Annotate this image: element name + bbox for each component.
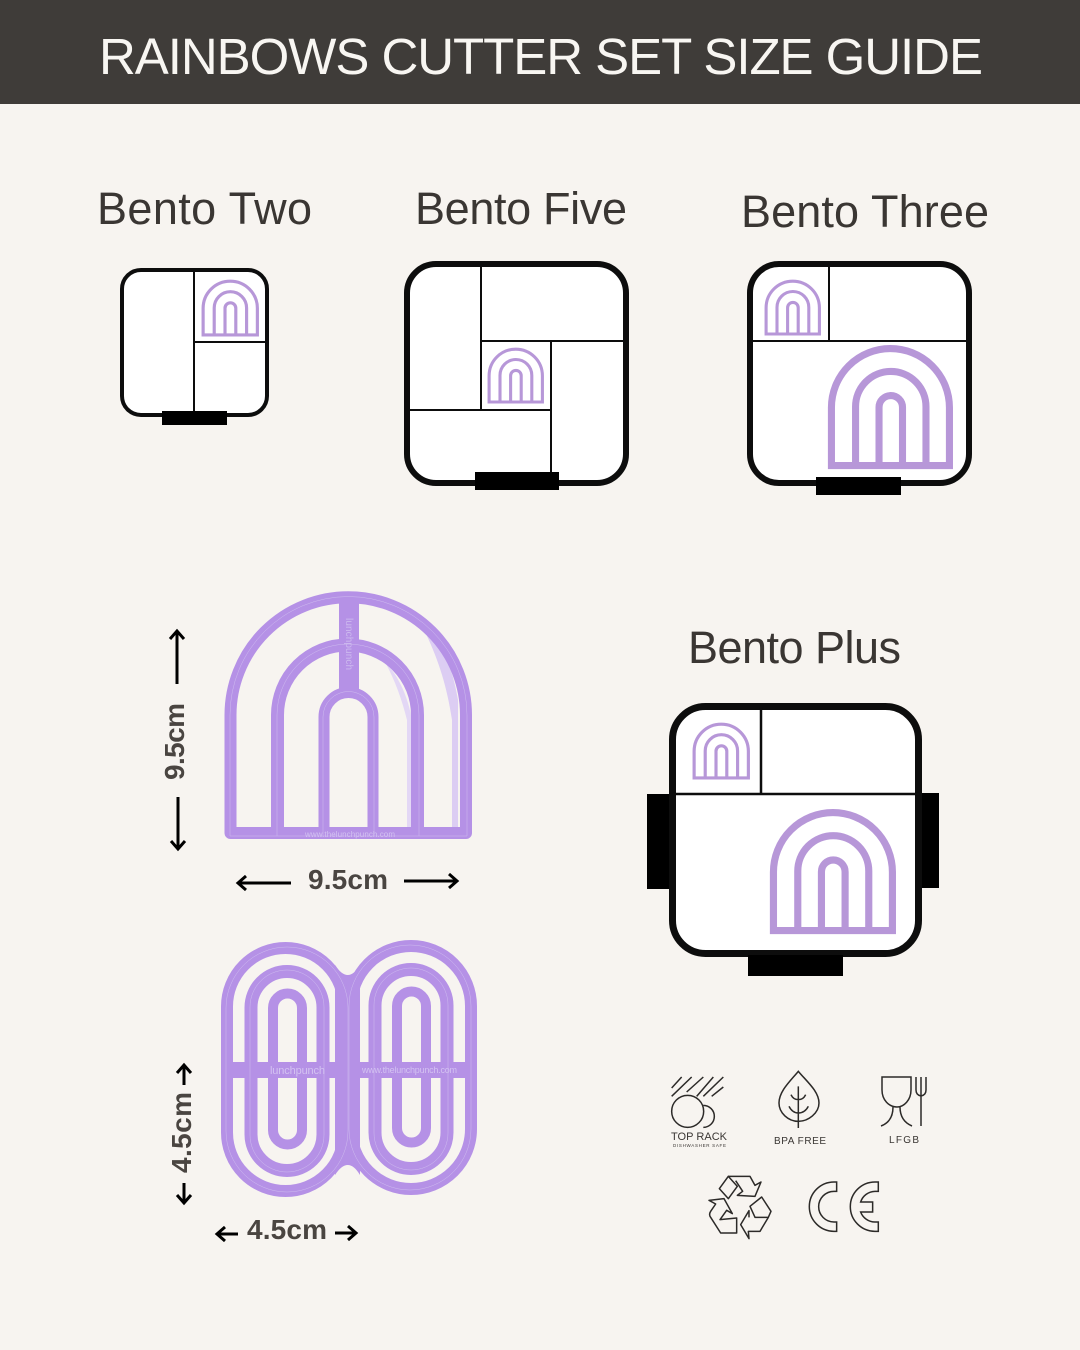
icon: small rainbow (203, 281, 257, 335)
dimension: width 9.5cm (238, 864, 457, 895)
icon: small rainbow (489, 349, 542, 402)
dimension: height 9.5cm (159, 631, 190, 849)
icon: top rack dishwasher safe: TOP RACK (671, 1131, 728, 1143)
panel: Bento Two lunchbox (122, 270, 267, 425)
small purple double rainbow cutter: www.thelunchpunch.com (361, 1065, 457, 1075)
title banner (0, 0, 1080, 104)
icon: large rainbow (831, 349, 949, 466)
arrow: down (177, 1183, 191, 1203)
icon: recycle (709, 1176, 771, 1239)
arrow: down (171, 797, 185, 849)
dimension: width 4.5cm (217, 1214, 356, 1245)
icon: top rack dishwasher safe: DISHWASHER SAFE (673, 1143, 726, 1148)
small purple double rainbow cutter (222, 945, 476, 1192)
heading: Bento Three: Bento Three (741, 186, 989, 237)
icon: CE mark (809, 1182, 878, 1231)
arrow: left (217, 1227, 238, 1241)
icon: LFGB food safe (881, 1077, 926, 1146)
dimension: height 4.5cm (166, 1065, 197, 1203)
icon: top rack dishwasher safe (671, 1077, 728, 1148)
title banner: RAINBOWS CUTTER SET SIZE GUIDE (99, 28, 983, 85)
icon: small rainbow (694, 724, 748, 778)
dimension: width 9.5cm: 9.5cm (308, 864, 388, 895)
large purple rainbow cutter: lunchpunch (343, 618, 354, 670)
panel: Bento Three lunchbox (750, 264, 969, 495)
dimension: height 4.5cm: 4.5cm (166, 1092, 197, 1173)
large purple rainbow cutter: www.thelunchpunch.com (304, 830, 395, 839)
dimension: width 4.5cm: 4.5cm (247, 1214, 327, 1245)
icon: LFGB food safe: LFGB (889, 1135, 919, 1146)
heading: Bento Plus: Bento Plus (688, 622, 901, 673)
arrow: up (170, 631, 184, 684)
icon: small rainbow (766, 281, 819, 334)
icon: BPA free leaf: BPA FREE (774, 1136, 826, 1147)
heading: Bento Five: Bento Five (415, 183, 627, 234)
large purple rainbow cutter (230, 595, 467, 839)
dimension: height 9.5cm: 9.5cm (159, 703, 190, 780)
arrow: up (177, 1065, 191, 1085)
heading: Bento Two: Bento Two (97, 183, 312, 234)
arrow: left (238, 876, 291, 890)
icon: BPA free leaf (774, 1071, 826, 1147)
icon: large rainbow (773, 813, 892, 931)
small purple double rainbow cutter: lunchpunch (270, 1065, 325, 1077)
panel: Bento Five lunchbox (407, 264, 626, 490)
arrow: right (335, 1226, 356, 1240)
panel: Bento Plus lunchbox (647, 706, 939, 976)
arrow: right (404, 874, 457, 888)
